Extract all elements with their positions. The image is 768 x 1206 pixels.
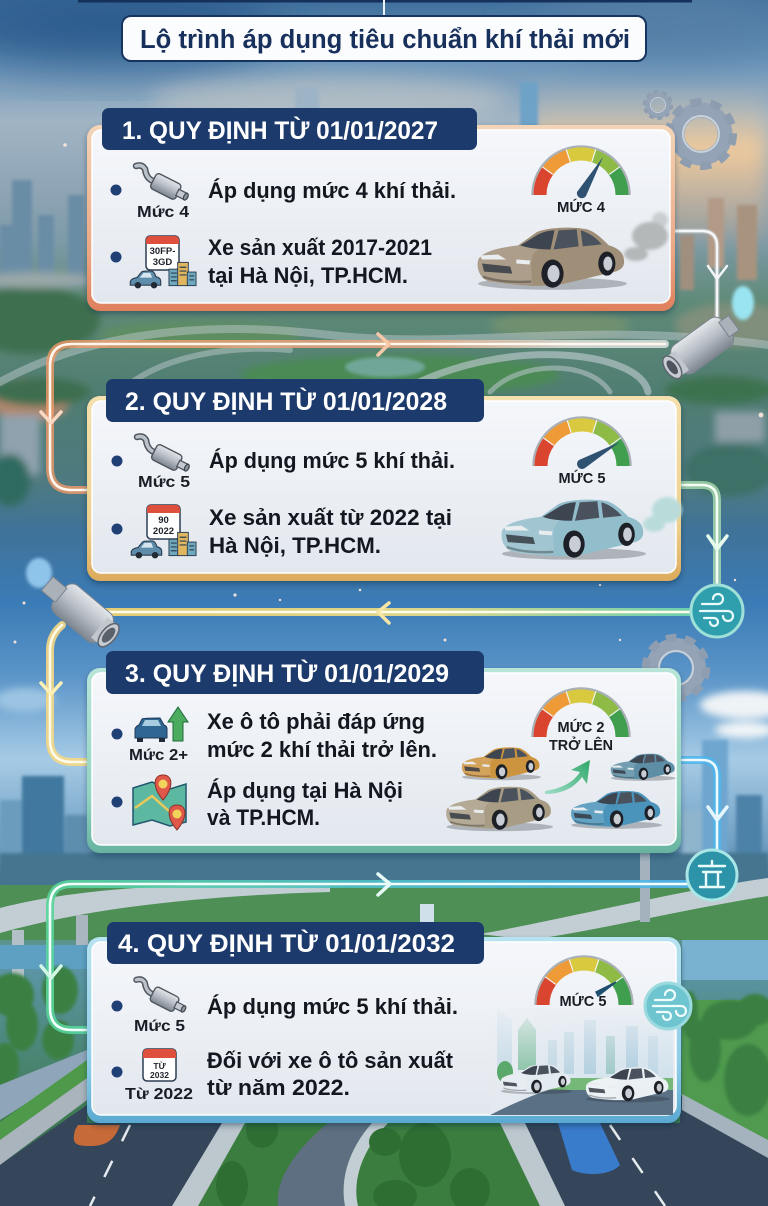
text: level 5: Áp dụng mức 5 khí thải. xyxy=(207,994,458,1019)
icon: muffler level 5 xyxy=(137,436,192,476)
text: location: và TP.HCM. xyxy=(207,805,320,830)
smoke xyxy=(643,497,682,532)
gauge: level 5: MỨC 5 xyxy=(560,992,606,1010)
heading: rule 3: 3. QUY ĐỊNH TỪ 01/01/2029 xyxy=(125,658,449,688)
text: from 2022 xyxy=(207,1048,454,1100)
arrow: Hanoi badge to card 4 xyxy=(41,874,692,1030)
scene: green city with electric cars xyxy=(486,1008,673,1115)
title: Lộ trình áp dụng tiêu chuẩn khí thải mới xyxy=(140,26,630,54)
gears top right xyxy=(645,92,733,166)
icon: Hanoi landmark badge xyxy=(687,850,737,900)
bullet 3.1 xyxy=(112,728,122,740)
text: location: Áp dụng tại Hà Nội xyxy=(207,778,403,803)
arrow: card 1 to muffler xyxy=(672,231,727,326)
gauge: level 4: MỨC 4 xyxy=(557,198,606,216)
icon: calendar with car and city xyxy=(131,505,196,558)
icon: calendar 2032: TỪ xyxy=(153,1060,167,1071)
heading: rule 2: 2. QUY ĐỊNH TỪ 01/01/2028 xyxy=(125,386,447,416)
icon: calendar 2032 xyxy=(143,1049,176,1081)
icon: calendar 2032: 2032 xyxy=(150,1070,169,1080)
icon: muffler level 4 xyxy=(136,165,191,205)
bottom highway xyxy=(0,1094,768,1206)
icon: muffler level 5 xyxy=(136,979,189,1017)
heading: rule 4: 4. QUY ĐỊNH TỪ 01/01/2032 xyxy=(118,928,455,958)
text: location xyxy=(207,778,403,830)
text: from 2022: Hà Nội, TP.HCM. xyxy=(209,533,381,558)
bullet 2.2 xyxy=(112,524,122,534)
bullet 4.2 xyxy=(112,1066,122,1078)
bullet 3.2 xyxy=(112,796,122,808)
gauge: level 2 and above: MỨC 2 xyxy=(558,718,604,736)
text: production years xyxy=(208,235,432,288)
text: from 2022: từ năm 2022. xyxy=(207,1075,350,1100)
middle elevated roads xyxy=(0,852,768,1000)
icon: calendar with car and city: 30FP- xyxy=(150,246,175,257)
icon: calendar with car and city xyxy=(130,236,196,288)
top connector stub xyxy=(78,0,692,17)
car: brown sedan xyxy=(478,228,627,290)
label: Mức 2+: Mức 2+ xyxy=(129,747,188,764)
gauge: level 5: MỨC 5 xyxy=(558,469,606,487)
text: from 2022: Xe sản xuất từ 2022 tại xyxy=(209,505,452,530)
panel: rule 3 xyxy=(87,651,681,853)
heading: rule 4 xyxy=(107,922,484,964)
panel: rule 2 xyxy=(87,379,682,581)
text: from 2022 xyxy=(209,505,452,558)
text: requirement: mức 2 khí thải trở lên. xyxy=(207,737,437,762)
heading: rule 1 xyxy=(102,108,477,150)
cars: older vehicles xyxy=(446,747,676,831)
arrow: card 3 to Hanoi badge xyxy=(678,760,727,852)
text: production years: Xe sản xuất 2017-2021 xyxy=(208,235,432,260)
text: requirement: Xe ô tô phải đáp ứng xyxy=(207,709,425,734)
car: light blue SUV xyxy=(502,500,646,560)
label: Từ 2022: Từ 2022 xyxy=(125,1086,193,1103)
heading: rule 3 xyxy=(106,651,484,694)
bullet 4.1 xyxy=(112,1000,122,1012)
bullet 2.1 xyxy=(112,456,122,466)
gauge: level 5 xyxy=(536,957,632,1010)
bullet 1.1 xyxy=(110,184,122,196)
arrow: muffler left to card 3 xyxy=(41,625,90,762)
icon: muffler left with vapor xyxy=(26,558,126,653)
gauge: level 2 and above xyxy=(532,689,630,754)
heading: rule 2 xyxy=(106,379,484,422)
icon: calendar with car and city: 90 xyxy=(158,515,169,526)
title xyxy=(122,16,646,61)
panel: rule 1 xyxy=(87,108,675,311)
gauge: level 5 xyxy=(534,418,630,487)
icon: calendar with car and city: 3GD xyxy=(153,257,172,268)
text: from 2022: Đối với xe ô tô sản xuất xyxy=(207,1048,454,1073)
icon: car with up arrow xyxy=(135,707,188,742)
arrow: muffler to card 2 xyxy=(41,334,665,490)
icon: wind badge xyxy=(691,585,743,637)
panel: rule 4 xyxy=(87,922,691,1123)
gauge: level 4 xyxy=(532,147,630,216)
gear behind card 3 xyxy=(646,638,706,698)
label: Mức 5: Mức 5 xyxy=(134,1018,185,1035)
smoke xyxy=(624,212,668,261)
heading: rule 1: 1. QUY ĐỊNH TỪ 01/01/2027 xyxy=(122,115,438,145)
arrow: upgrade xyxy=(545,760,590,794)
label: Mức 4: Mức 4 xyxy=(137,204,189,221)
text: level 5: Áp dụng mức 5 khí thải. xyxy=(209,448,455,473)
arrow: wind badge to muffler left xyxy=(105,603,695,623)
bullet 1.2 xyxy=(110,252,122,262)
arrow: card 2 to wind badge xyxy=(678,485,727,586)
icon: wind badge xyxy=(645,983,691,1029)
text: requirement xyxy=(207,709,437,762)
icon: map with pins xyxy=(133,775,186,830)
icon: calendar with car and city: 2022 xyxy=(153,526,174,537)
gauge: level 2 and above: TRỞ LÊN xyxy=(549,736,613,754)
text: production years: tại Hà Nội, TP.HCM. xyxy=(208,263,408,288)
label: Mức 5: Mức 5 xyxy=(138,474,190,491)
icon: muffler right with vapor xyxy=(657,286,754,385)
text: level 4: Áp dụng mức 4 khí thải. xyxy=(208,178,456,203)
